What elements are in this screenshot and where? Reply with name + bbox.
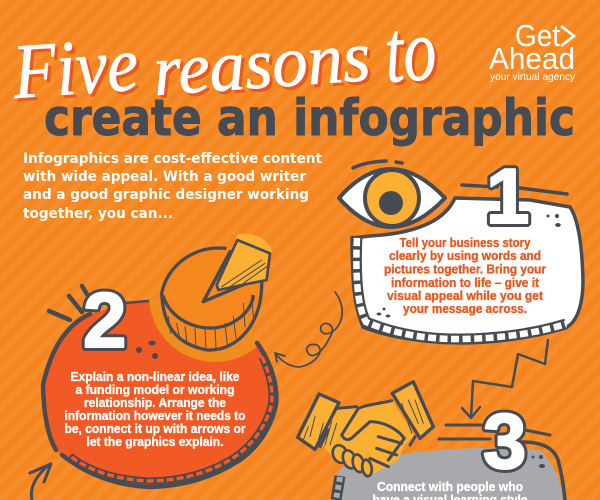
panel 3 text bbox=[372, 480, 528, 500]
intro text: with wide appeal. With a good writer bbox=[23, 169, 306, 185]
panel 3 shape bbox=[333, 448, 563, 500]
arrow: zigzag, panel 1 to 3 bbox=[462, 340, 548, 418]
panel 1 text: visual appeal while you get bbox=[387, 289, 544, 303]
dots bbox=[376, 214, 561, 318]
panel 1: tell your story bbox=[339, 152, 583, 343]
number 2: 2 bbox=[83, 276, 126, 364]
intro text: together, you can... bbox=[23, 206, 173, 222]
number 1 line bbox=[462, 185, 567, 194]
pie chart icon bbox=[162, 234, 272, 350]
pie cutout bbox=[149, 300, 260, 362]
intro text: Infographics are cost-effective content bbox=[23, 151, 322, 167]
panel 3: connect with people bbox=[298, 382, 565, 500]
title: Five reasons to: Five bbox=[9, 19, 141, 115]
number 2 line bbox=[125, 301, 148, 303]
panel 3 text: Connect with people who bbox=[377, 480, 523, 494]
title: Five reasons to: to bbox=[382, 2, 439, 102]
panel 2: non-linear idea bbox=[43, 230, 281, 487]
logo: Get Ahead: your virtual agency bbox=[490, 71, 576, 83]
handshake icon bbox=[298, 382, 433, 477]
panel 1 text: clearly by using words and bbox=[389, 249, 541, 263]
panel 1 text bbox=[384, 236, 546, 316]
emphasis strokes bbox=[49, 286, 90, 320]
panel 2 text: be, connect it up with arrows or bbox=[64, 422, 246, 436]
logo: Get Ahead: Ahead bbox=[489, 41, 575, 76]
title: Five reasons to: reasons bbox=[151, 16, 373, 111]
title: Five reasons to: Five bbox=[12, 22, 144, 118]
panel 2 shape bbox=[44, 300, 277, 487]
panel 2 text bbox=[64, 370, 246, 449]
panel 2 text: information however it needs to bbox=[64, 409, 246, 423]
panel 1 text: Tell your business story bbox=[400, 236, 531, 250]
number 2: 2 bbox=[83, 276, 126, 364]
panel 2 text: relationship. Arrange the bbox=[84, 396, 226, 410]
panel 1 shape bbox=[352, 198, 583, 343]
arrow: curly, panel 1 to 2 bbox=[275, 292, 342, 367]
logo: Get Ahead bbox=[489, 18, 576, 83]
title: Five reasons to: to bbox=[385, 5, 442, 105]
title: Five reasons to bbox=[9, 2, 442, 118]
number 1: 1 bbox=[486, 152, 529, 240]
panel 2 text: a funding model or working bbox=[76, 383, 234, 397]
intro text bbox=[23, 151, 322, 222]
number 3: 3 bbox=[483, 397, 526, 485]
eye bbox=[339, 161, 445, 227]
panel 1 text: your message across. bbox=[403, 302, 527, 316]
number 1: 1 bbox=[486, 152, 529, 240]
title: Five reasons to: reasons bbox=[154, 19, 376, 114]
panel 2 text: let the graphics explain. bbox=[86, 435, 224, 449]
number 3: 3 bbox=[483, 397, 526, 485]
arrow: bottom left bbox=[30, 464, 51, 500]
dots bbox=[532, 455, 545, 468]
panel 2 text: Explain a non-linear idea, like bbox=[70, 370, 240, 384]
number 3 lines bbox=[439, 425, 550, 439]
panel 1 text: information to life – give it bbox=[391, 276, 540, 290]
panel 1 text: pictures together. Bring your bbox=[384, 262, 546, 276]
dots bbox=[136, 340, 158, 359]
intro text: and a good graphic designer working bbox=[23, 187, 309, 203]
logo: Get Ahead: Get bbox=[515, 18, 560, 53]
